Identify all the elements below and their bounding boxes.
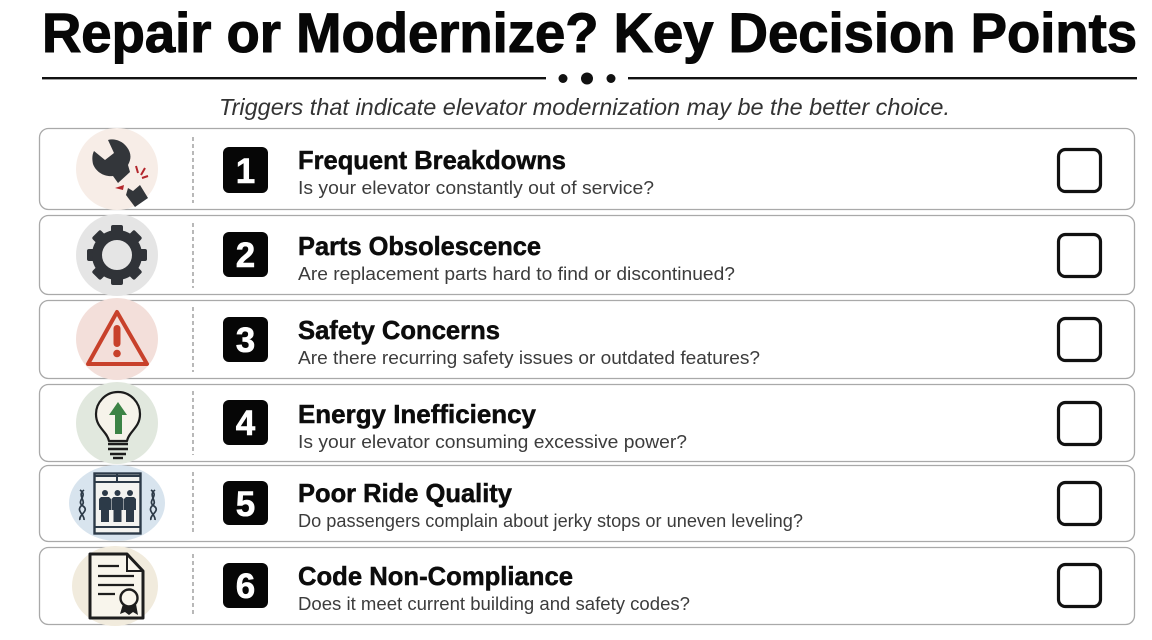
number badge 5: 5 xyxy=(236,485,255,524)
number badge 3: 3 xyxy=(236,321,255,360)
icon: elevator with passengers xyxy=(69,465,165,541)
number badge 1: 1 xyxy=(236,152,255,191)
checkbox xyxy=(1058,564,1100,606)
icon: broken wrench xyxy=(76,128,158,210)
number badge 2 xyxy=(223,232,268,277)
title: Repair or Modernize? Key Decision Points xyxy=(42,1,1137,64)
question: Do passengers complain about jerky stops or uneven leveling? xyxy=(298,511,803,531)
panel: safety concerns xyxy=(40,298,1134,380)
question: Is your elevator consuming excessive power? xyxy=(298,432,687,452)
number badge 2: 2 xyxy=(236,236,255,275)
number badge 4 xyxy=(223,400,268,445)
number badge 1 xyxy=(223,147,268,193)
subtitle: Triggers that indicate elevator modernization may be the better choice. xyxy=(219,94,950,120)
divider with dots xyxy=(42,72,1137,84)
checkbox xyxy=(1058,482,1100,524)
icon: warning triangle xyxy=(76,298,158,380)
checkbox xyxy=(1058,402,1100,444)
panel: parts obsolescence xyxy=(40,214,1134,296)
heading: Code Non-Compliance xyxy=(298,561,573,591)
dashed separator xyxy=(192,391,194,455)
question: Does it meet current building and safety codes? xyxy=(298,594,690,614)
checkbox xyxy=(1058,234,1100,276)
panel: energy inefficiency xyxy=(40,382,1134,464)
question: Are replacement parts hard to find or discontinued? xyxy=(298,264,735,284)
panel: poor ride quality xyxy=(40,465,1134,542)
number badge 3 xyxy=(223,317,268,362)
dashed separator xyxy=(192,307,194,372)
number badge 4: 4 xyxy=(236,404,256,443)
icon: certificate document xyxy=(72,546,158,626)
checkbox xyxy=(1058,318,1100,360)
heading: Poor Ride Quality xyxy=(298,478,513,508)
panel: frequent breakdowns xyxy=(40,128,1134,210)
dashed separator xyxy=(192,472,194,535)
icon: gear xyxy=(76,214,158,296)
heading: Parts Obsolescence xyxy=(298,231,541,261)
dashed separator xyxy=(192,223,194,288)
dashed separator xyxy=(192,137,194,203)
number badge 6: 6 xyxy=(236,567,255,606)
question: Are there recurring safety issues or outdated features? xyxy=(298,348,760,368)
number badge 6 xyxy=(223,563,268,608)
heading: Safety Concerns xyxy=(298,315,500,345)
dashed separator xyxy=(192,554,194,617)
icon: light bulb with arrow xyxy=(76,382,158,464)
panel: code non-compliance xyxy=(40,546,1134,626)
question: Is your elevator constantly out of service? xyxy=(298,178,654,198)
heading: Frequent Breakdowns xyxy=(298,145,566,175)
number badge 5 xyxy=(223,481,268,525)
checkbox xyxy=(1058,150,1100,192)
heading: Energy Inefficiency xyxy=(298,399,537,429)
